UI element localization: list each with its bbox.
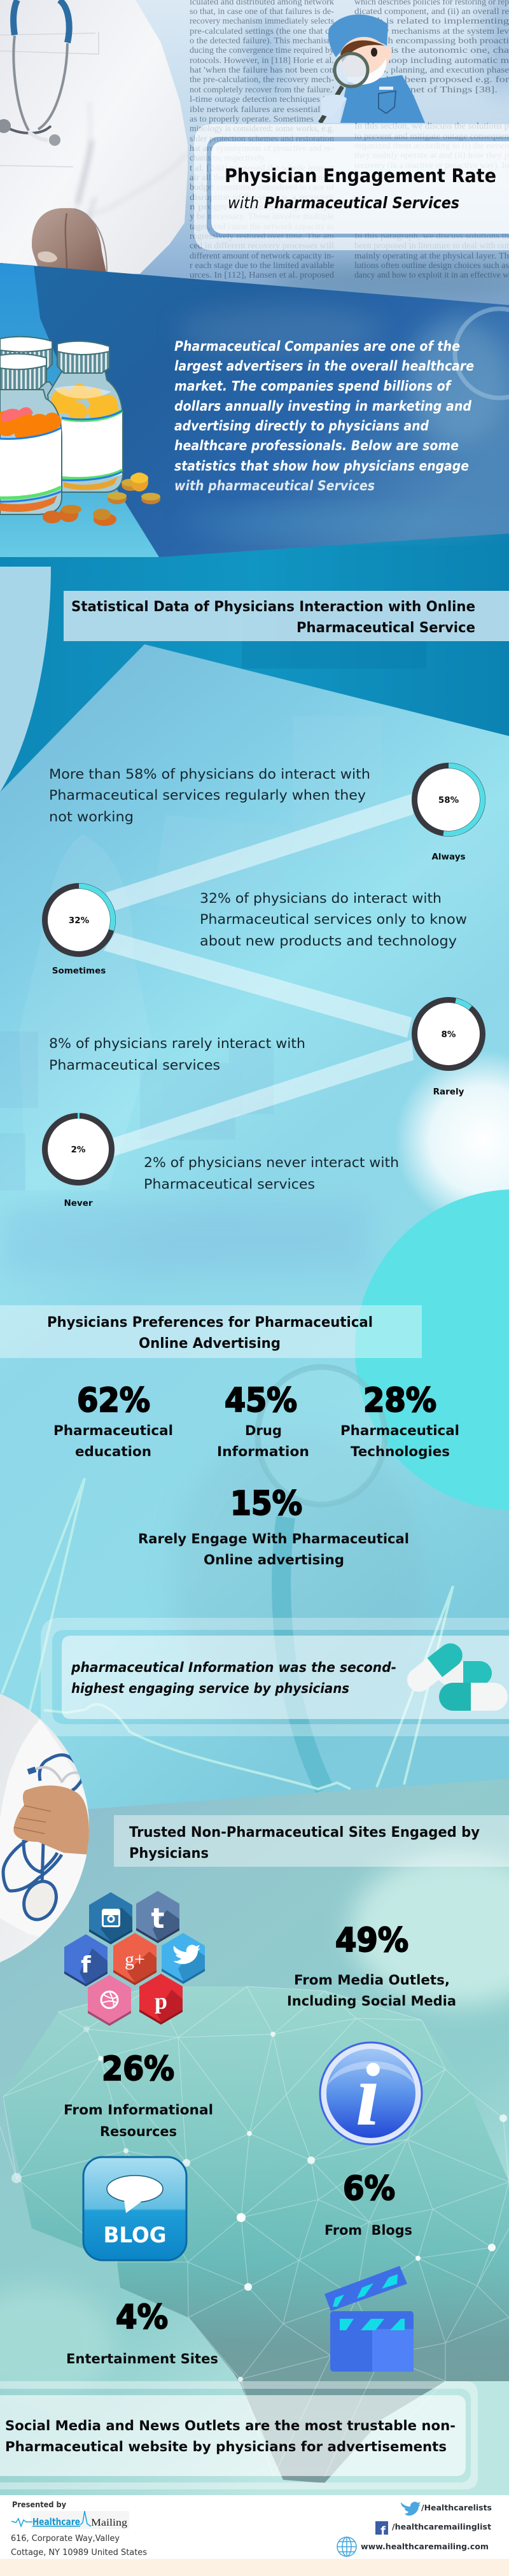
text: 32% description: about new products and technology xyxy=(200,933,457,949)
document text background: dancy and how to exploit it in an effective w xyxy=(354,270,509,280)
stat: 4% entertainment: Entertainment Sites xyxy=(66,2351,218,2367)
twitter xyxy=(162,1933,205,1984)
title: Pharmaceutical Services xyxy=(264,194,459,212)
document text background: n progress across multiple steps xyxy=(190,202,334,211)
document text background: dicated component, and (ii) an overall re xyxy=(354,6,509,16)
facebook handle: /healthcaremailinglist xyxy=(392,2522,491,2531)
document text background: different amount of network capacity in- xyxy=(190,251,335,260)
document text background xyxy=(190,0,509,280)
text: 8% description: 8% of physicians rarely interact with xyxy=(49,1036,305,1052)
front bottle xyxy=(0,354,62,514)
document text background: organized them according to (i) the netwo xyxy=(354,141,509,150)
document text background: t al. [240] proposed the whole impact xyxy=(190,163,334,173)
chart: never 2% xyxy=(45,1113,112,1208)
text: introduction: market. The companies spend billions of xyxy=(174,378,452,395)
icon: movie clapper xyxy=(324,2266,414,2372)
callout text: highest engaging service by physicians xyxy=(71,1681,349,1696)
google plus: g+ xyxy=(125,1949,145,1970)
document text background: air all the network elements in a single xyxy=(190,173,334,182)
back bottle xyxy=(0,337,59,407)
panel: trusted sites background xyxy=(0,1779,509,2499)
stat: 26% informational resources xyxy=(64,2050,213,2139)
text: 2% description: 2% of physicians never interact with xyxy=(144,1155,399,1171)
text: 58% description xyxy=(49,767,370,825)
callout text: pharmaceutical Information was the second- xyxy=(71,1660,396,1675)
document text background: recovery mechanisms at the system lev xyxy=(354,26,509,36)
document text background: disruption of the service, a recovery xyxy=(190,192,334,202)
heading: trusted sites: Trusted Non-Pharmaceutical Sites Engaged by xyxy=(129,1825,480,1841)
document text background: lutions often outline design choices such as xyxy=(354,260,509,270)
document text background: In this paragraph, we discuss solutions th xyxy=(354,231,509,241)
chart: always 58%: Always xyxy=(431,852,466,862)
text: 32% description: Pharmaceutical services only to know xyxy=(200,912,467,928)
address: Cottage, NY 10989 United States xyxy=(11,2548,147,2558)
chart: never 2%: 2% xyxy=(71,1145,86,1155)
text: introduction xyxy=(174,339,474,494)
callout: social media and news outlets xyxy=(0,2381,478,2489)
document text background: recovery mechanism immediately selects xyxy=(190,16,334,25)
stat: 6% blogs: From Blogs xyxy=(324,2223,412,2238)
document text background: rogressively restored over time. The am xyxy=(190,231,335,241)
neural network xyxy=(0,1986,509,2477)
website: www.healthcaremailing.com xyxy=(361,2542,489,2551)
stat: 26% informational resources: Resources xyxy=(100,2124,177,2139)
stat: 15% rarely engage xyxy=(138,1485,409,1568)
icon: medicine bottles xyxy=(0,337,160,526)
stat: 49% media outlets: 49% xyxy=(335,1921,408,1960)
document text background: sider protection schemes and restoration xyxy=(190,134,334,143)
callout text xyxy=(5,2418,456,2454)
text: 2% description xyxy=(144,1155,399,1192)
panel: header background xyxy=(132,0,509,305)
title xyxy=(225,165,496,212)
text: 32% description xyxy=(200,891,467,949)
stat: 62% pharmaceutical education: Pharmaceutical xyxy=(53,1423,173,1438)
chart: always 58% xyxy=(414,765,483,862)
document text background: the pre-calculation, the recovery mech- xyxy=(190,74,335,84)
address xyxy=(11,2534,147,2558)
document text background: pre-calculated settings (the one that co xyxy=(190,26,334,36)
stethoscope background xyxy=(2,1367,453,1789)
stat: 62% pharmaceutical education: education xyxy=(75,1444,151,1459)
callout: pharmaceutical information xyxy=(41,1618,509,1736)
stat: 45% drug information xyxy=(217,1382,309,1459)
stat: 28% pharmaceutical technologies xyxy=(340,1382,459,1459)
panel: intro band xyxy=(0,263,509,598)
hand xyxy=(13,1785,89,1855)
stat: 15% rarely engage: Rarely Engage With Pharmaceutical xyxy=(138,1531,409,1546)
facebook: f xyxy=(81,1952,91,1978)
presented by: Presented by xyxy=(12,2500,66,2509)
google plus xyxy=(113,1933,157,1985)
document text background: rotocols. However, in [118] Horie et al. xyxy=(190,55,334,65)
document text background: hat are synonymous of proactive and re- xyxy=(190,143,335,153)
document text background: which is related to implementing xyxy=(354,16,509,25)
text: 32% description: 32% of physicians do interact with xyxy=(200,891,442,907)
chart: sometimes 32%: 32% xyxy=(69,916,90,926)
dribbble xyxy=(88,1975,131,2026)
icon: capsules xyxy=(402,1638,508,1711)
icon: blog xyxy=(83,2157,186,2260)
document text background: ced in different recovery processes will xyxy=(190,241,334,250)
heading: trusted sites: Physicians xyxy=(129,1846,209,1862)
chart: always 58%: 58% xyxy=(438,795,459,805)
document text background: been proposed in literature to deal with out xyxy=(354,241,509,250)
document text background: ducing the convergence time required by xyxy=(190,45,334,55)
text: 2% description: Pharmaceutical services xyxy=(144,1177,315,1192)
pinterest: p xyxy=(155,1988,167,2014)
document text background: r each stage due to the limited available xyxy=(190,260,334,270)
stat: 45% drug information: Information xyxy=(217,1444,309,1459)
document text background: hat 'when the failure has not been con xyxy=(190,65,334,74)
chart: rarely 8% xyxy=(408,994,489,1097)
network nodes xyxy=(11,2026,507,2382)
connectors between circles xyxy=(104,794,414,1156)
address: 616, Corporate Way,Valley xyxy=(11,2534,120,2544)
callout text xyxy=(71,1660,396,1696)
heading: trusted sites xyxy=(114,1815,509,1867)
chart: rarely 8%: 8% xyxy=(442,1030,456,1040)
text: 58% description: More than 58% of physicians do interact with xyxy=(49,767,370,782)
document text background: budget constraints considered in case of xyxy=(190,182,335,192)
stat: 45% drug information: 45% xyxy=(225,1382,297,1420)
icon: social media hexagons xyxy=(64,1891,205,2026)
document text background: not completely recover from the failure.' xyxy=(190,85,334,94)
document text background: tages, and cause the network capacity to xyxy=(190,222,334,231)
icon: information: i xyxy=(356,2046,380,2144)
stat: 28% pharmaceutical technologies: 28% xyxy=(363,1382,436,1420)
document text background: y be necessary. These involve multiple xyxy=(190,211,334,221)
heading: statistical data xyxy=(64,591,509,641)
chart: sometimes 32% xyxy=(45,886,113,976)
heading: preferences xyxy=(0,1305,422,1358)
title: Physician Engagement Rate xyxy=(225,165,496,187)
document text background: approach encompassing both proacti xyxy=(354,36,509,45)
document text background: minology is considered: some works, e.g. xyxy=(190,124,334,133)
logo: Healthcare xyxy=(32,2516,80,2528)
logo xyxy=(11,2511,129,2529)
stat: 49% media outlets: From Media Outlets, xyxy=(294,1972,450,1988)
icon: facebook: f xyxy=(380,2524,386,2538)
text: introduction: dollars annually investing in marketing and xyxy=(174,399,472,414)
text: introduction: with pharmaceutical Services xyxy=(174,478,375,494)
panel: statistics background xyxy=(0,558,509,1859)
stat: 49% media outlets xyxy=(287,1921,456,2009)
stat: 6% blogs: 6% xyxy=(343,2170,395,2208)
callout text: Pharmaceutical website by physicians for advertisements xyxy=(5,2439,447,2454)
chart: rarely 8%: Rarely xyxy=(433,1087,464,1097)
document text background: In this section, we discuss the solutions p xyxy=(354,121,509,131)
text: 58% description: Pharmaceutical services regularly when they xyxy=(49,788,366,803)
text: 58% description: not working xyxy=(49,809,134,825)
stat: 26% informational resources: From Informational xyxy=(64,2102,213,2118)
text: 8% description xyxy=(49,1036,305,1073)
stat: 15% rarely engage: 15% xyxy=(230,1485,302,1523)
icon: blog: BLOG xyxy=(103,2223,167,2248)
stat: 4% entertainment xyxy=(66,2298,218,2367)
scattered pills xyxy=(43,472,160,526)
document text background: for the Internet of Things [38]. xyxy=(354,85,498,94)
heading: statistical data: Pharmaceutical Service xyxy=(296,620,475,636)
stat: 62% pharmaceutical education xyxy=(53,1382,173,1459)
heading: preferences: Physicians Preferences for Pharmaceutical xyxy=(47,1315,373,1331)
document text background: l-time outage detection techniques ide xyxy=(190,94,334,104)
stat: 28% pharmaceutical technologies: Pharmaceutical xyxy=(340,1423,459,1438)
stat: 28% pharmaceutical technologies: Technologies xyxy=(351,1444,450,1459)
twitter handle: /Healthcarelists xyxy=(421,2503,492,2512)
chart: sometimes 32%: Sometimes xyxy=(52,966,106,976)
footer xyxy=(0,2495,509,2576)
stat: 4% entertainment: 4% xyxy=(116,2298,168,2337)
heading: statistical data: Statistical Data of Physicians Interaction with Online xyxy=(71,599,475,615)
panel: title card xyxy=(194,124,509,250)
document text background: they mainly operate at and (ii) how they p xyxy=(354,150,509,160)
stat: 15% rarely engage: Online advertising xyxy=(204,1552,344,1568)
document text background: chanisms, respectively. xyxy=(190,153,266,162)
document text background: mainly operating at the physical layer. Th xyxy=(354,251,509,260)
document text background: analysis, planning, and execution phase xyxy=(354,65,509,74)
icon: information xyxy=(320,2042,422,2144)
callout text: Social Media and News Outlets are the most trustable non- xyxy=(5,2418,456,2433)
brain shape xyxy=(3,1986,509,2483)
stethoscope xyxy=(0,0,69,146)
text: introduction: Pharmaceutical Companies are one of the xyxy=(174,339,460,355)
logo: Mailing xyxy=(91,2517,127,2528)
text: introduction: largest advertisers in the overall healthcare xyxy=(174,358,474,374)
document text background: recovery (in a reactive or proactive way). In xyxy=(354,160,509,170)
document text background: o the detected failure). This mechanism xyxy=(190,36,335,45)
facebook xyxy=(64,1934,108,1986)
stethoscope tubes xyxy=(3,1755,81,1891)
document text background: aspects is the autonomic one, cha xyxy=(354,45,509,55)
text: 8% description: Pharmaceutical services xyxy=(49,1058,220,1073)
title: with xyxy=(228,194,259,212)
stat: 45% drug information: Drug xyxy=(245,1423,282,1438)
stat: 6% blogs xyxy=(324,2170,412,2238)
document text background: to prevent and mitigate outage consequen xyxy=(354,131,509,141)
icon: globe xyxy=(337,2537,356,2556)
heading: preferences: Online Advertising xyxy=(139,1336,281,1352)
stat: 62% pharmaceutical education: 62% xyxy=(77,1382,150,1420)
right bottle xyxy=(48,341,123,492)
stat: 26% informational resources: 26% xyxy=(102,2050,174,2088)
doctor in white coat xyxy=(0,0,188,275)
document text background: as to properly operate. Sometimes xyxy=(190,114,314,124)
instagram xyxy=(89,1892,132,1944)
document text background: ible network failures are essential for xyxy=(190,104,335,114)
pinterest xyxy=(139,1974,183,2025)
tumblr xyxy=(136,1891,179,1943)
doctor holding stethoscope xyxy=(0,1682,89,1974)
document text background: so that, in case one of that failures is de- xyxy=(190,6,335,16)
text: introduction: advertising directly to physicians and xyxy=(174,418,429,434)
document text background: which has been proposed e.g. for xyxy=(354,74,509,84)
document text background: control loop including automatic m xyxy=(354,55,509,65)
tumblr: t xyxy=(151,1902,165,1935)
chest piece xyxy=(22,1879,58,1921)
hand xyxy=(32,208,106,272)
chart: never 2%: Never xyxy=(64,1198,93,1208)
icon: facebook xyxy=(375,2521,388,2538)
text: introduction: healthcare professionals. Below are some xyxy=(174,438,459,454)
icon: nurse with magnifier xyxy=(318,14,425,123)
document text background: urces. In [112], Hansen et al. proposed xyxy=(190,270,334,280)
text: introduction: statistics that show how physicians engage xyxy=(174,458,469,474)
icon: twitter xyxy=(401,2502,421,2516)
stat: 49% media outlets: Including Social Media xyxy=(287,1993,456,2009)
